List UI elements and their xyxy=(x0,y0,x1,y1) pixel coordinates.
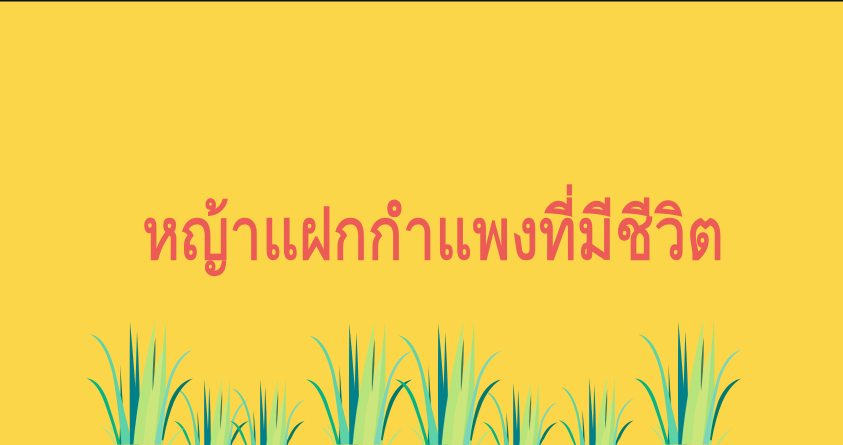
large grass tuft 1 xyxy=(87,320,193,445)
small grass tuft 4 xyxy=(559,376,634,445)
large grass tuft 3 xyxy=(395,321,501,445)
top border line xyxy=(0,0,843,2)
large grass tuft 2 xyxy=(306,322,412,445)
small grass tuft 1 xyxy=(174,378,249,445)
large grass tuft 4 xyxy=(635,320,741,445)
grass illustration xyxy=(87,320,741,445)
small grass tuft 2 xyxy=(230,378,305,445)
small grass tuft 3 xyxy=(483,382,558,445)
